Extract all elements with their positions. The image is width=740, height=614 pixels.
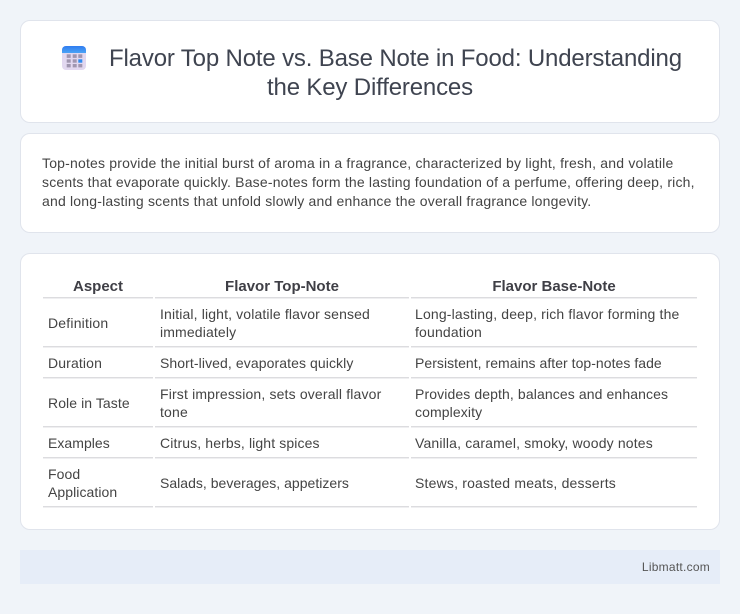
table content: Role in Taste — [48, 395, 130, 411]
title: Flavor Top Note vs. Base Note in Food: Understanding — [109, 45, 682, 72]
table content: First impression, sets overall flavor — [160, 386, 381, 402]
panel: title card — [20, 20, 720, 123]
intro text: Top-notes provide the initial burst of aroma in a fragrance, characterized by light, fresh, and volatile — [42, 155, 673, 171]
intro text: scents that evaporate quickly. Base-notes form the lasting foundation of a perfume, offering deep, rich, — [42, 174, 695, 190]
table content: Initial, light, volatile flavor sensed — [160, 306, 370, 322]
table content: Duration — [48, 355, 102, 371]
table content: Stews, roasted meats, desserts — [415, 475, 616, 491]
table content: tone — [160, 404, 188, 420]
table content: Flavor Top-Note — [225, 278, 339, 295]
table content: foundation — [415, 324, 482, 340]
table content: Provides depth, balances and enhances — [415, 386, 668, 402]
table content: Salads, beverages, appetizers — [160, 475, 349, 491]
intro text — [42, 155, 695, 209]
table content: Citrus, herbs, light spices — [160, 435, 320, 451]
footer bar — [20, 550, 720, 584]
panel: comparison table — [20, 253, 720, 530]
table content: Flavor Base-Note — [492, 278, 616, 295]
intro text: and long-lasting scents that unfold slowly and enhance the overall fragrance longevity. — [42, 193, 591, 209]
panel: introduction — [20, 133, 720, 233]
table content: immediately — [160, 324, 236, 340]
table content: Application — [48, 484, 117, 500]
table content: Short-lived, evaporates quickly — [160, 355, 353, 371]
title: the Key Differences — [267, 74, 473, 101]
table content: Examples — [48, 435, 110, 451]
table content: Vanilla, caramel, smoky, woody notes — [415, 435, 653, 451]
table content: complexity — [415, 404, 482, 420]
table content: Aspect — [73, 278, 123, 295]
table content: Food — [48, 466, 80, 482]
icon: calendar — [62, 46, 86, 70]
footer text: Libmatt.com — [642, 560, 710, 574]
table content: Definition — [48, 315, 108, 331]
title — [109, 45, 682, 101]
table content: Persistent, remains after top-notes fade — [415, 355, 662, 371]
table content: Long-lasting, deep, rich flavor forming the — [415, 306, 679, 322]
